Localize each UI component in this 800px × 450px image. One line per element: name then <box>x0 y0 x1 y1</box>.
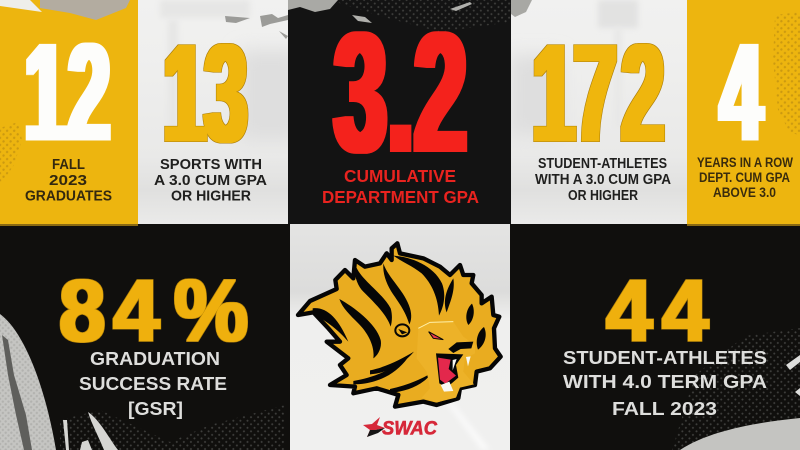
label: graduation success rate gsr: SUCCESS RATE <box>79 373 227 394</box>
lion face <box>395 322 475 402</box>
label: student-athletes 3.0 cum gpa: STUDENT-ATHLETES <box>538 156 667 172</box>
panel: 84% graduation success rate <box>0 224 290 450</box>
panel: 13 sports <box>138 0 300 224</box>
label: student-athletes 3.0 cum gpa: WITH A 3.0 CUM GPA <box>535 172 671 188</box>
label: fall 2023 graduates: 2023 <box>49 172 87 189</box>
label: graduation success rate gsr: GRADUATION <box>90 348 220 369</box>
number: 13: 13 <box>163 15 247 171</box>
brush stroke <box>680 418 800 450</box>
label: graduation success rate gsr: [GSR] <box>128 398 183 419</box>
icon: swac logo: SWAC <box>382 418 437 440</box>
label: years in a row dept cum gpa above 3.0 <box>697 155 793 200</box>
label: fall 2023 graduates: FALL <box>52 156 85 173</box>
halftone <box>60 405 285 450</box>
label: years in a row dept cum gpa above 3.0: ABOVE 3.0 <box>713 185 776 200</box>
label: graduation success rate gsr <box>79 348 227 419</box>
label: student-athletes 3.0 cum gpa <box>535 156 671 204</box>
icon: swac logo <box>363 417 437 440</box>
label: student-athletes 4.0 term gpa fall 2023: WITH 4.0 TERM GPA <box>563 371 767 392</box>
number: 44: 44 <box>606 262 709 360</box>
panel: 12 fall graduates <box>0 0 138 224</box>
label: student-athletes 4.0 term gpa fall 2023: STUDENT-ATHLETES <box>563 347 767 368</box>
label: fall 2023 graduates: GRADUATES <box>25 188 112 204</box>
mane stripes <box>313 256 486 393</box>
number: 3.2: 3.2 <box>334 0 467 188</box>
number: 4: 4 <box>720 14 763 170</box>
label: sports with a 3.0 cum gpa or higher <box>154 156 267 204</box>
label: cumulative department gpa: DEPARTMENT GPA <box>322 187 479 207</box>
label: sports with a 3.0 cum gpa or higher: A 3.0 CUM GPA <box>154 172 267 189</box>
number: 84%: 84% <box>59 262 248 360</box>
label: student-athletes 4.0 term gpa fall 2023: FALL 2023 <box>612 398 717 419</box>
number: 12: 12 <box>24 14 110 170</box>
label: student-athletes 3.0 cum gpa: OR HIGHER <box>568 188 638 204</box>
icon: golden lion head <box>298 243 501 407</box>
panel: 44 student-athletes <box>510 224 800 450</box>
label: sports with a 3.0 cum gpa or higher: SPORTS WITH <box>160 156 262 173</box>
panel: 3.2 department gpa <box>288 0 511 224</box>
label: fall 2023 graduates <box>25 156 112 204</box>
panel: 172 student-athletes <box>510 0 687 224</box>
halftone <box>672 328 800 450</box>
panel: lion logo <box>290 224 510 450</box>
label: student-athletes 4.0 term gpa fall 2023 <box>563 347 767 419</box>
label: sports with a 3.0 cum gpa or higher: OR HIGHER <box>171 188 251 204</box>
label: cumulative department gpa: CUMULATIVE <box>344 166 456 186</box>
brush stroke <box>0 314 56 450</box>
panel: 4 years in a row <box>687 0 800 224</box>
number: 172: 172 <box>532 15 664 171</box>
label: cumulative department gpa <box>322 166 479 207</box>
